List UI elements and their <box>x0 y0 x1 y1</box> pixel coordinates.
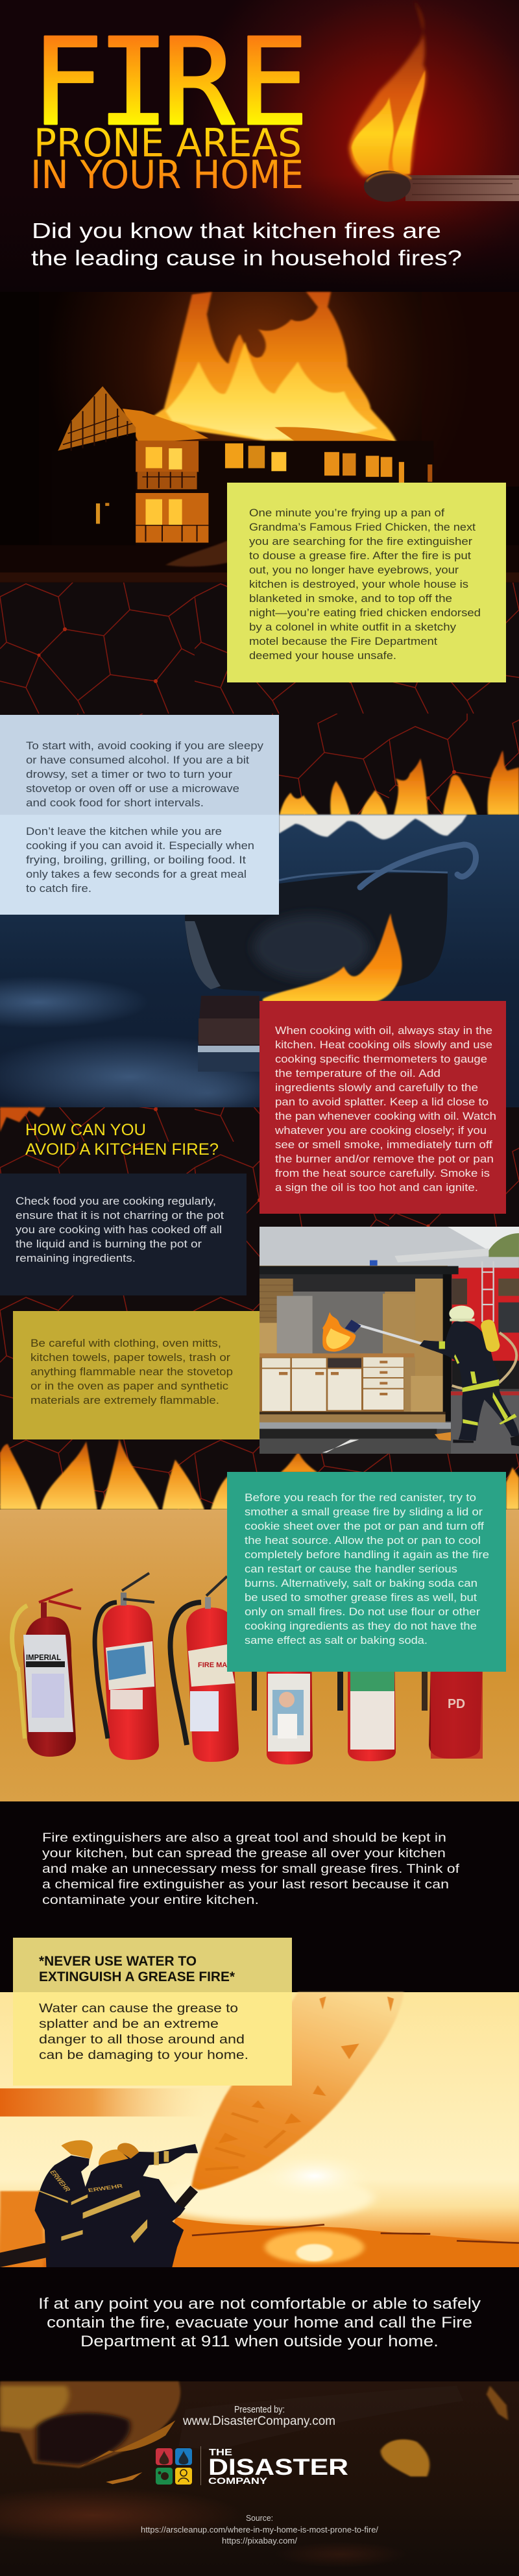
pot flame <box>263 913 402 1002</box>
icon: burning match <box>349 0 519 202</box>
panel: pale blue tips <box>0 715 279 915</box>
text block: warning detail: splatter and be an extreme <box>39 2017 219 2031</box>
house dark body <box>51 432 136 545</box>
text block: warning detail <box>39 2002 248 2062</box>
flames: small top left <box>0 1107 45 1132</box>
panel: closing message: If at any point you are not comfortable or able to safely <box>38 2295 481 2313</box>
flames over house <box>142 292 397 443</box>
panel: teal grease fire advice: completely before handling it again as the fire <box>245 1549 489 1561</box>
panel: closing message: contain the fire, evacuate your home and call the Fire <box>47 2314 472 2331</box>
photo: pot over flame <box>0 815 519 1119</box>
panel: olive tip: materials are extremely flammable. <box>30 1395 219 1406</box>
panel: red oil tips: When cooking with oil, always stay in the <box>275 1025 492 1037</box>
panel: never use water <box>13 1938 292 2086</box>
panel: pale blue tips: and cook food for short intervals. <box>26 797 204 809</box>
hose and extinguisher nozzle <box>355 1324 443 1350</box>
extinguisher 1 <box>12 1589 81 1757</box>
text: sources <box>141 2513 378 2546</box>
logo: The Disaster Company: COMPANY <box>208 2476 267 2486</box>
text block: fire extinguishers: and make an unnecessary mess for small grease fires. Think of <box>42 1862 460 1876</box>
lit left windows <box>136 441 199 472</box>
text block: fire extinguishers: Fire extinguishers are also a great tool and should be kept in <box>42 1831 446 1845</box>
panel: yellow intro text: you are searching for the fire extinguisher <box>249 536 473 548</box>
heading: how can you avoid a kitchen fire: HOW CAN YOU <box>25 1121 146 1139</box>
panel: pale blue tips: frying, broiling, grilling, or boiling food. It <box>26 854 246 866</box>
heading: how can you avoid a kitchen fire <box>25 1121 219 1159</box>
panel: pale blue tips: To start with, avoid cooking if you are sleepy <box>26 740 264 752</box>
panel: yellow intro text: by a colonel in white outfit in a sketchy <box>249 621 457 633</box>
extinguisher 6 <box>422 1609 483 1759</box>
panel: dark navy tip <box>0 1174 247 1295</box>
panel: pale blue tips: only takes a few seconds for a great meal <box>26 869 247 880</box>
extinguisher 4 <box>252 1609 313 1764</box>
extinguisher 2 <box>95 1573 159 1760</box>
panel: red oil tips: kitchen. Heat cooking oils slowly and use <box>275 1039 492 1051</box>
firefighter <box>420 1321 519 1441</box>
panel: dark navy tip: ensure that it is not charring or the pot <box>16 1210 224 1222</box>
panel: pale blue tips: drowsy, set a timer or two to turn your <box>26 769 233 780</box>
panel: red oil tips: the burner and/or remove the pot or pan <box>275 1153 494 1165</box>
panel: yellow intro text: kitchen is destroyed, your whole house is <box>249 579 468 590</box>
text: presented by <box>182 2404 335 2428</box>
logo: The Disaster Company: THE <box>209 2447 232 2458</box>
panel: red oil tips: the temperature of the oil. Add <box>275 1068 441 1079</box>
firefighter silhouettes <box>35 2144 198 2267</box>
text block: fire extinguishers: a chemical fire extinguisher as your last resort because it can <box>42 1878 449 1892</box>
panel: red oil tips: from the heat source carefully. Smoke is <box>275 1168 490 1179</box>
truck <box>452 1268 519 1389</box>
photo: firefighters spraying water <box>0 1992 519 2267</box>
title: FIRE: FIRE <box>31 12 309 152</box>
icon: fire tile <box>156 2448 173 2465</box>
heading: warning: *NEVER USE WATER TO <box>39 1954 197 1969</box>
extinguisher 3 <box>171 1576 239 1762</box>
floor <box>260 1423 457 1429</box>
panel: olive tip: Be careful with clothing, oven mitts, <box>30 1338 221 1349</box>
roof glow <box>123 409 400 451</box>
photo: firefighters spraying water: ERWEHR <box>47 2170 72 2193</box>
panel: pale blue tips: cooking if you can avoid it. Especially when <box>26 840 254 852</box>
panel: teal grease fire advice: can restart or cause the handler serious <box>245 1563 457 1575</box>
heading: warning <box>39 1954 235 1984</box>
panel: yellow intro text: Grandma’s Famous Fried Chicken, the next <box>249 522 476 533</box>
text block: fire extinguishers: your kitchen, but can spread the grease all over your kitchen <box>42 1847 446 1860</box>
panel: dark navy tip: remaining ingredients. <box>16 1253 136 1264</box>
heading: how can you avoid a kitchen fire: AVOID A KITCHEN FIRE? <box>25 1140 219 1159</box>
extinguisher 6: PD <box>448 1697 465 1711</box>
panel: red oil tips <box>260 1001 506 1214</box>
text: sources: Source: <box>246 2513 273 2523</box>
heading: prone areas in your home: IN YOUR HOME <box>30 152 304 198</box>
photo: burning house <box>0 292 519 583</box>
text block: did you know: Did you know that kitchen fires are <box>32 219 441 243</box>
panel: olive tip: kitchen towels, paper towels, trash or <box>30 1352 231 1364</box>
panel: red oil tips: cooking specific thermometers to gauge <box>275 1053 487 1065</box>
panel: pale blue tips: or have consumed alcohol. If you are a bit <box>26 754 249 766</box>
panel: teal grease fire advice: only on small fires. Do not use flour or other <box>245 1606 481 1618</box>
flames: lava edge tongues <box>280 751 519 815</box>
panel: yellow intro text: deemed your house unsafe. <box>249 650 396 662</box>
panel: red oil tips: see or smell smoke, immediately turn off <box>275 1139 492 1151</box>
gable <box>58 386 136 451</box>
text: presented by: www.DisasterCompany.com <box>182 2414 335 2428</box>
text block: warning detail: Water can cause the grease to <box>39 2002 238 2016</box>
panel: yellow intro text: out, you no longer have eyebrows, your <box>249 564 459 576</box>
icon: water tile <box>175 2448 192 2465</box>
panel: dark navy tip: Check food you are cooking regularly, <box>16 1196 216 1207</box>
panel: teal grease fire advice <box>227 1472 506 1672</box>
panel: closing message <box>0 2267 519 2381</box>
panel: yellow intro text: blanketed in smoke, and to top off the <box>249 593 452 605</box>
kitchen box <box>260 1266 448 1421</box>
text: sources: https://arscleanup.com/where-in-my-home-is-most-prone-to-fire/ <box>141 2525 378 2534</box>
heading: prone areas in your home <box>30 121 304 198</box>
panel: teal grease fire advice: Before you reach for the red canister, try to <box>245 1492 476 1504</box>
pot body <box>185 873 448 993</box>
background: lava cracks lower <box>0 1107 519 1510</box>
panel: olive tip: anything flammable near the stovetop <box>30 1366 233 1378</box>
panel: yellow intro text <box>227 483 506 682</box>
logo: The Disaster Company: DISASTER <box>208 2455 348 2480</box>
flames: lower band tongues <box>0 1439 519 1510</box>
lit right windows <box>225 443 243 468</box>
panel: dark navy tip: you are cooking with has cooked off all <box>16 1224 222 1236</box>
text block: did you know: the leading cause in household fires? <box>31 246 462 270</box>
panel: yellow intro text: One minute you’re frying up a pan of <box>249 507 444 519</box>
text block: warning detail: danger to all those around and <box>39 2033 245 2047</box>
photo: fire extinguishers on wall <box>0 1510 519 1801</box>
background: lava cracks <box>0 583 519 815</box>
text block: fire extinguishers <box>42 1831 460 1907</box>
panel: red oil tips: the pan whenever cooking with oil. Watch <box>275 1111 496 1122</box>
footer: dim fire background <box>0 2381 519 2576</box>
ground <box>0 545 519 583</box>
panel: dark navy tip: the liquid and is burning the pot or <box>16 1238 202 1250</box>
pot handle <box>360 845 476 887</box>
panel: red oil tips: a sign the oil is too hot and can ignite. <box>275 1182 478 1194</box>
extinguisher 3: FIRE MAX <box>198 1661 232 1669</box>
panel: olive tip <box>13 1311 260 1439</box>
text block: warning detail: can be damaging to your home. <box>39 2049 248 2062</box>
text block: did you know <box>31 219 462 270</box>
panel: pale blue tips: Don’t leave the kitchen while you are <box>26 826 222 837</box>
text block: fire extinguishers: contaminate your entire kitchen. <box>42 1894 259 1907</box>
panel: olive tip: or in the oven as paper and synthetic <box>30 1380 228 1392</box>
panel: yellow intro text: to douse a grease fire. After the fire is put <box>249 550 471 562</box>
logo: The Disaster Company <box>156 2446 348 2486</box>
heading: warning: EXTINGUISH A GREASE FIRE* <box>39 1969 235 1984</box>
panel: header background <box>0 0 519 292</box>
photo: firefighters spraying water: ERWEHR <box>88 2184 124 2194</box>
panel: black section <box>0 1801 519 1992</box>
panel: teal grease fire advice: be used to smother grease fires as well, but <box>245 1592 477 1604</box>
panel: pale blue tips: to catch fire. <box>26 883 91 895</box>
heading: prone areas in your home: PRONE AREAS <box>34 121 302 166</box>
icon: biohazard tile <box>175 2468 192 2485</box>
panel: red oil tips: ingredients slowly and carefully to the <box>275 1082 478 1094</box>
panel: red oil tips: whatever you are cooking closely; if you <box>274 1125 487 1137</box>
pan fire <box>322 1312 356 1352</box>
panel: teal grease fire advice: cooking ingredients as they do not have the <box>245 1620 477 1632</box>
panel: teal grease fire advice: the heat source. Allow the pot or pan to cool <box>245 1535 481 1547</box>
panel: teal grease fire advice: cookie sheet over the pot or pan and turn off <box>245 1521 484 1532</box>
panel: red oil tips: pan to avoid splatter. Keep a lid close to <box>275 1096 489 1108</box>
text: sources: https://pixabay.com/ <box>222 2536 297 2546</box>
spray <box>191 1992 404 2190</box>
panel: teal grease fire advice: burns. Alternatively, salt or baking soda can <box>245 1578 477 1589</box>
extinguisher 5 <box>337 1609 396 1761</box>
icon: mold tile <box>156 2468 173 2485</box>
panel: teal grease fire advice: same effect as salt or baking soda. <box>245 1635 428 1646</box>
panel: yellow intro text: night—you’re eating fried chicken endorsed <box>249 607 481 619</box>
extinguisher 1: IMPERIAL <box>26 1653 61 1662</box>
text: presented by: Presented by: <box>234 2404 285 2415</box>
photo: firefighter kitchen demonstration <box>260 1227 519 1454</box>
panel: pale blue tips: stovetop or oven off or use a microwave <box>26 783 239 795</box>
panel: closing message: Department at 911 when outside your home. <box>80 2333 439 2350</box>
counter <box>260 1353 415 1357</box>
pot burner stand <box>198 996 260 1070</box>
panel: teal grease fire advice: smother a small grease fire by sliding a lid or <box>245 1506 483 1518</box>
panel: yellow intro text: motel because the Fire Department <box>249 636 437 647</box>
